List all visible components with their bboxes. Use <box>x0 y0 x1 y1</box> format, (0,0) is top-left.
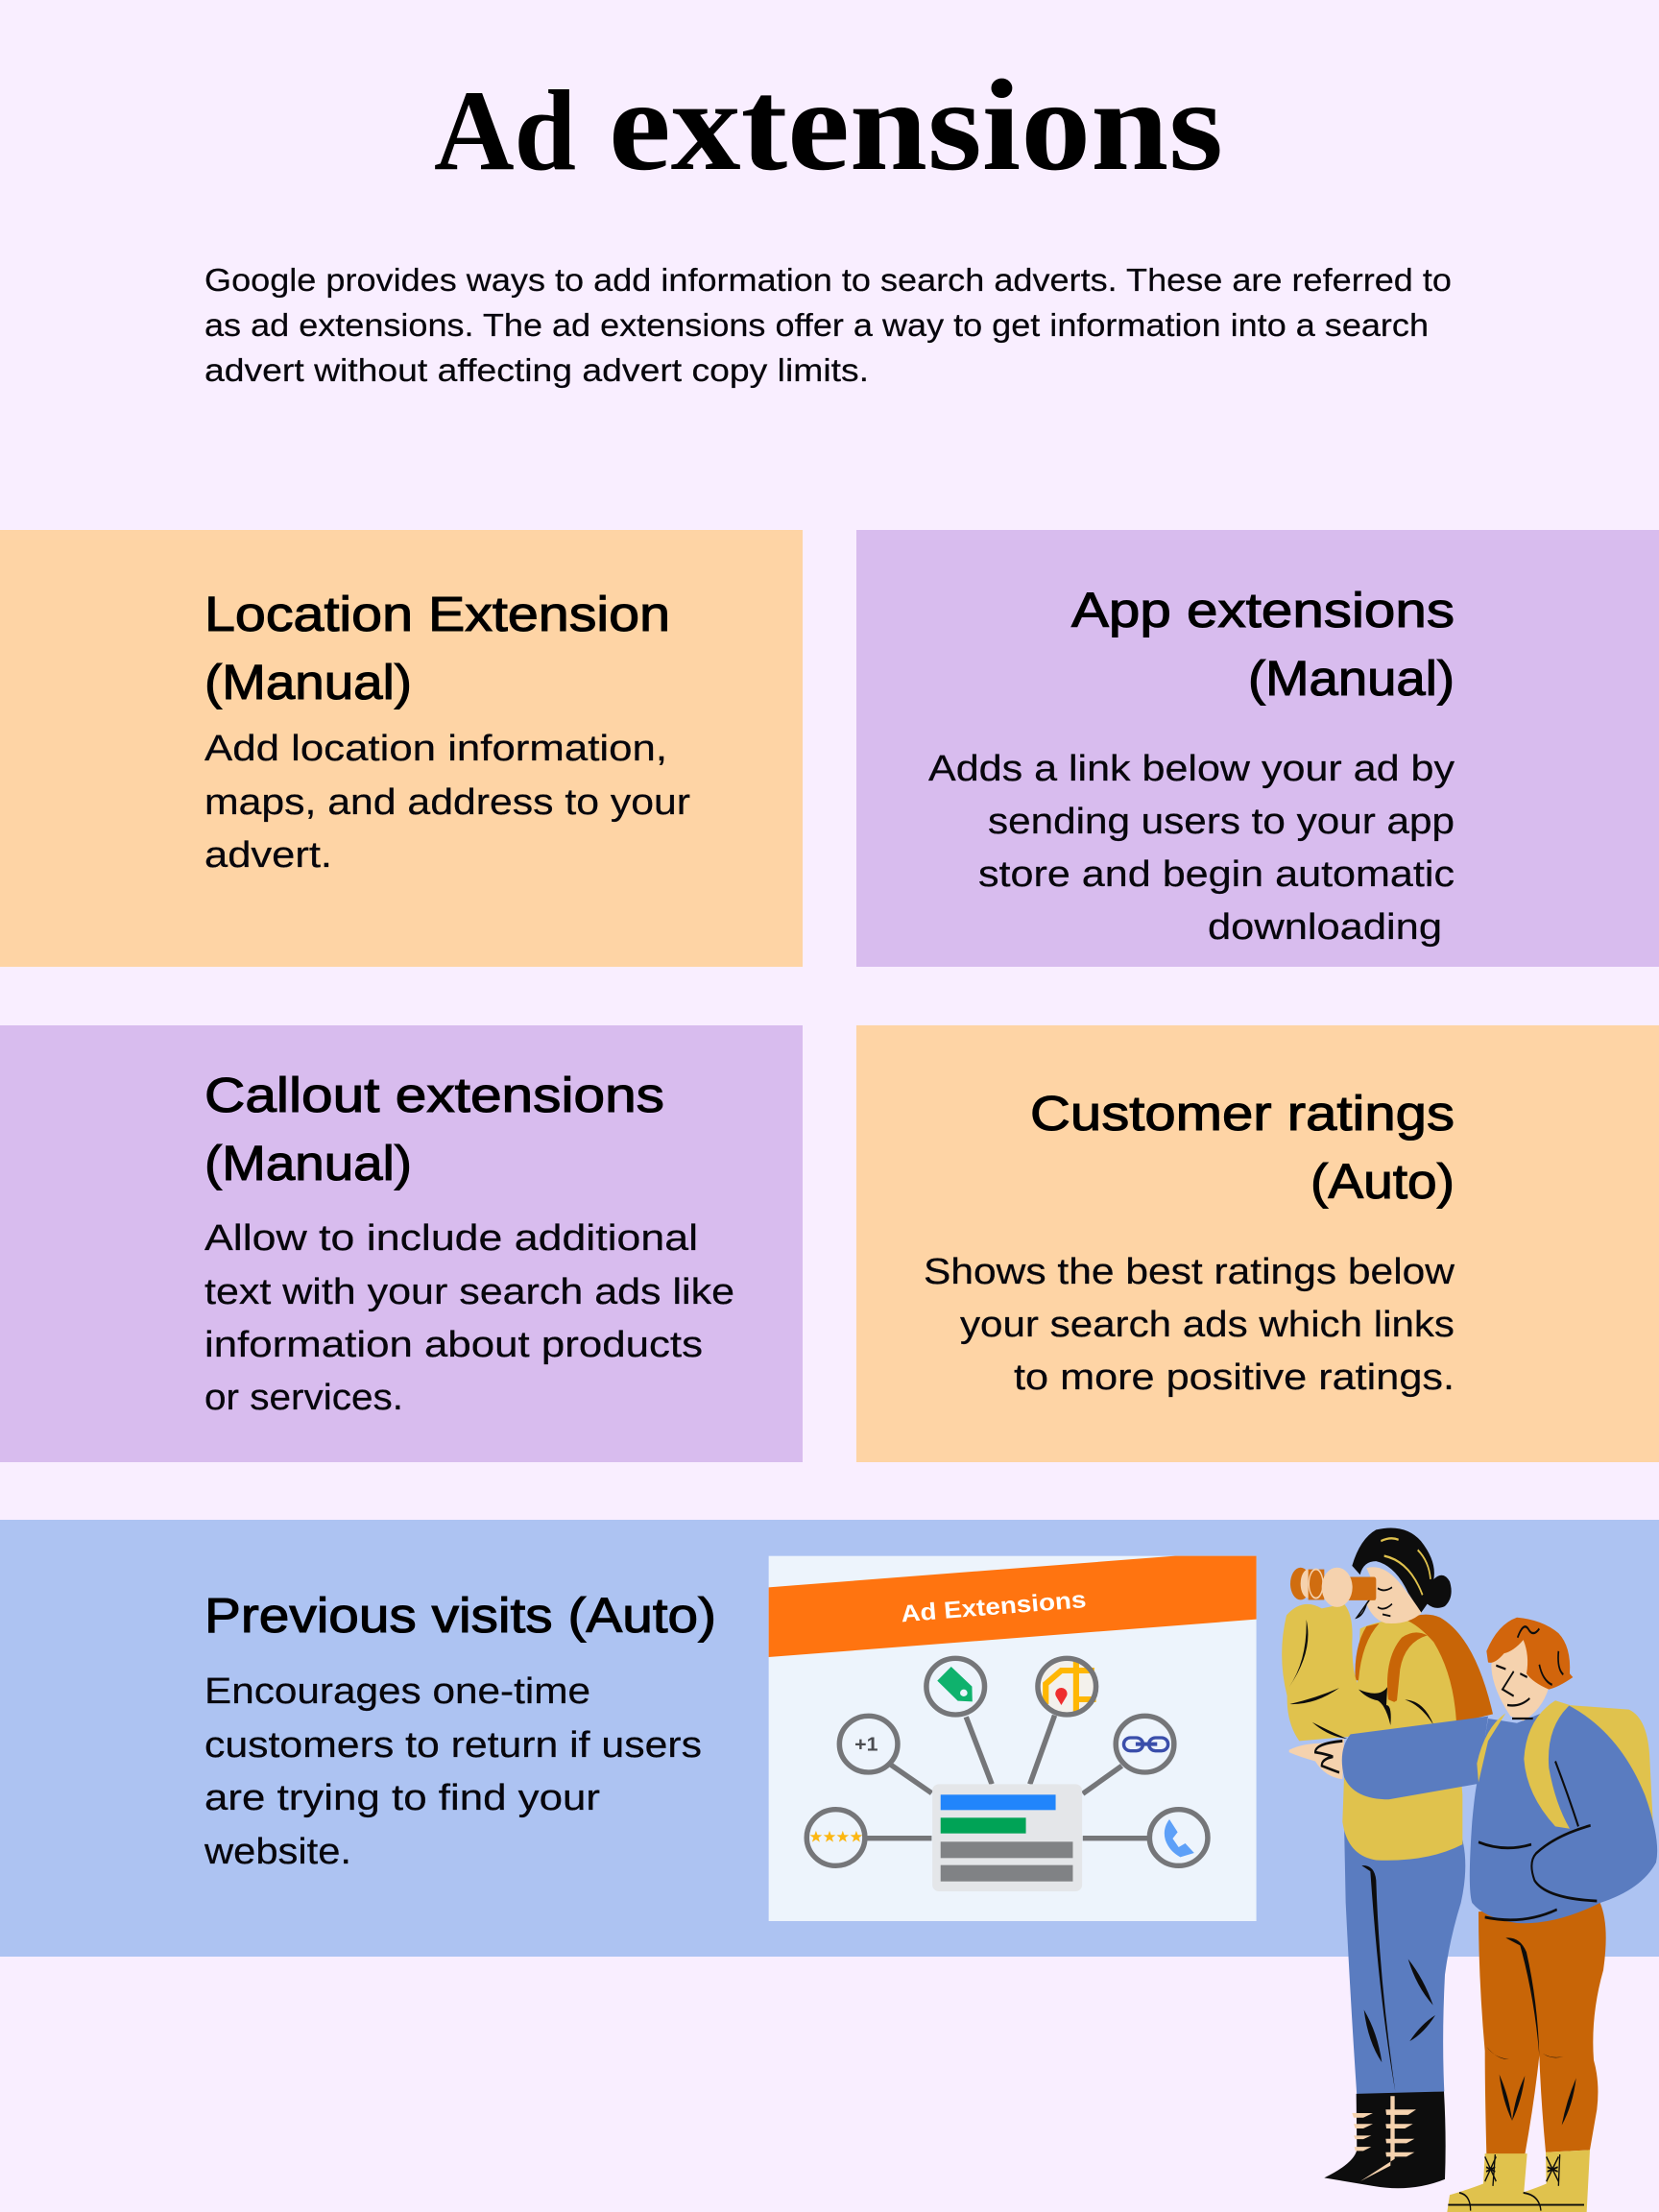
central ad card <box>932 1784 1082 1891</box>
intro text block: Google provides ways to add information to search adverts. These are referred to <box>204 262 1452 298</box>
backpack straps <box>1477 1700 1570 1829</box>
man pointing <box>1289 1618 1657 2212</box>
intro text block: as ad extensions. The ad extensions offer a way to get information into a search <box>204 307 1429 343</box>
binoculars <box>1290 1568 1376 1607</box>
body: previous visits <box>204 1671 702 1872</box>
pointing arm <box>1342 1717 1488 1799</box>
man's head <box>1491 1638 1549 1720</box>
icon: chain link <box>1116 1716 1174 1772</box>
woman's sweater <box>1342 1620 1462 1861</box>
body: customer ratings: to more positive ratings. <box>1014 1358 1455 1398</box>
orange banner <box>769 1556 1257 1657</box>
body: previous visits: website. <box>204 1832 351 1872</box>
heading: callout extensions: (Manual) <box>204 1136 412 1190</box>
woman's backpack <box>1405 1615 1493 1723</box>
heading: app extensions: App extensions <box>1071 583 1455 637</box>
icon: star rating <box>806 1810 865 1865</box>
title: extensions <box>609 54 1223 198</box>
icon: price tag <box>926 1658 985 1715</box>
body: callout extensions: Allow to include additional <box>204 1218 698 1259</box>
heading: callout extensions: Callout extensions <box>204 1068 664 1122</box>
title: Ad <box>434 66 576 194</box>
icon: plus one <box>839 1716 898 1772</box>
intro text block <box>204 262 1452 388</box>
ad extensions illustration <box>769 1556 1257 1921</box>
body: location extension: maps, and address to your <box>204 782 690 823</box>
woman's trousers <box>1344 1822 1465 2096</box>
trouser creases <box>1361 1865 1435 2092</box>
illustration: two hikers <box>1282 1527 1657 2212</box>
body: app extensions: Adds a link below your ad by <box>928 749 1455 789</box>
backpack straps <box>1355 1623 1428 1705</box>
connector lines <box>867 1716 1149 1839</box>
panel: callout extensions <box>0 1025 803 1462</box>
heading: callout extensions <box>204 1068 664 1190</box>
body: customer ratings: Shows the best ratings below <box>924 1252 1455 1292</box>
panel: previous visits <box>0 1520 1659 1957</box>
body: callout extensions: or services. <box>204 1378 403 1418</box>
heading: customer ratings <box>1030 1086 1455 1209</box>
icon: map pin <box>1038 1658 1096 1715</box>
heading: location extension: Location Extension <box>204 587 670 641</box>
pointing hand <box>1289 1739 1344 1779</box>
icon: phone <box>1149 1810 1208 1865</box>
sleeve folds <box>1289 1620 1433 1739</box>
man's trousers <box>1479 1903 1606 2154</box>
body: callout extensions <box>204 1218 734 1418</box>
man's backpack <box>1568 1705 1653 1822</box>
body: app extensions: store and begin automatic <box>978 854 1455 895</box>
face details <box>1357 1587 1392 1618</box>
man's boots <box>1447 2150 1590 2212</box>
icon: plus one: +1 <box>854 1734 878 1756</box>
hair strands and face lines <box>1496 1626 1563 1719</box>
intro text block: advert without affecting advert copy limits. <box>204 352 869 388</box>
trouser creases <box>1486 1937 1576 2126</box>
body: customer ratings <box>924 1252 1455 1398</box>
sweater folds <box>1479 1761 1597 1920</box>
heading: location extension: (Manual) <box>204 655 412 709</box>
woman with binoculars <box>1282 1527 1493 2188</box>
body: app extensions: downloading <box>1208 907 1442 948</box>
orange banner: Ad Extensions <box>900 1586 1087 1627</box>
body: customer ratings: your search ads which links <box>960 1305 1455 1345</box>
woman's face <box>1366 1567 1422 1623</box>
body: location extension: advert. <box>204 835 332 876</box>
heading: app extensions: (Manual) <box>1248 651 1455 706</box>
body: location extension: Add location information, <box>204 729 667 769</box>
body: previous visits: Encourages one-time <box>204 1671 590 1712</box>
raised arm <box>1282 1604 1433 1741</box>
panel: app extensions <box>856 530 1659 967</box>
body: previous visits: are trying to find your <box>204 1778 600 1818</box>
hair highlights <box>1381 1538 1431 1595</box>
hand finger lines <box>1315 1741 1342 1772</box>
panel: customer ratings <box>856 1025 1659 1462</box>
woman's hair <box>1352 1527 1452 1613</box>
body: callout extensions: information about products <box>204 1325 703 1365</box>
panel: location extension <box>0 530 803 967</box>
heading: app extensions <box>1071 583 1455 706</box>
body: app extensions: sending users to your app <box>988 802 1455 842</box>
body: previous visits: customers to return if users <box>204 1725 702 1766</box>
man's hair <box>1486 1618 1573 1690</box>
woman's boots <box>1324 2092 1446 2188</box>
heading: previous visits: Previous visits (Auto) <box>204 1588 716 1643</box>
heading: customer ratings: (Auto) <box>1310 1154 1455 1209</box>
body: app extensions <box>928 749 1455 948</box>
body: location extension <box>204 729 690 876</box>
heading: location extension <box>204 587 670 709</box>
heading: customer ratings: Customer ratings <box>1030 1086 1455 1141</box>
body: callout extensions: text with your search ads like <box>204 1272 734 1312</box>
man's sweater <box>1470 1705 1657 1923</box>
